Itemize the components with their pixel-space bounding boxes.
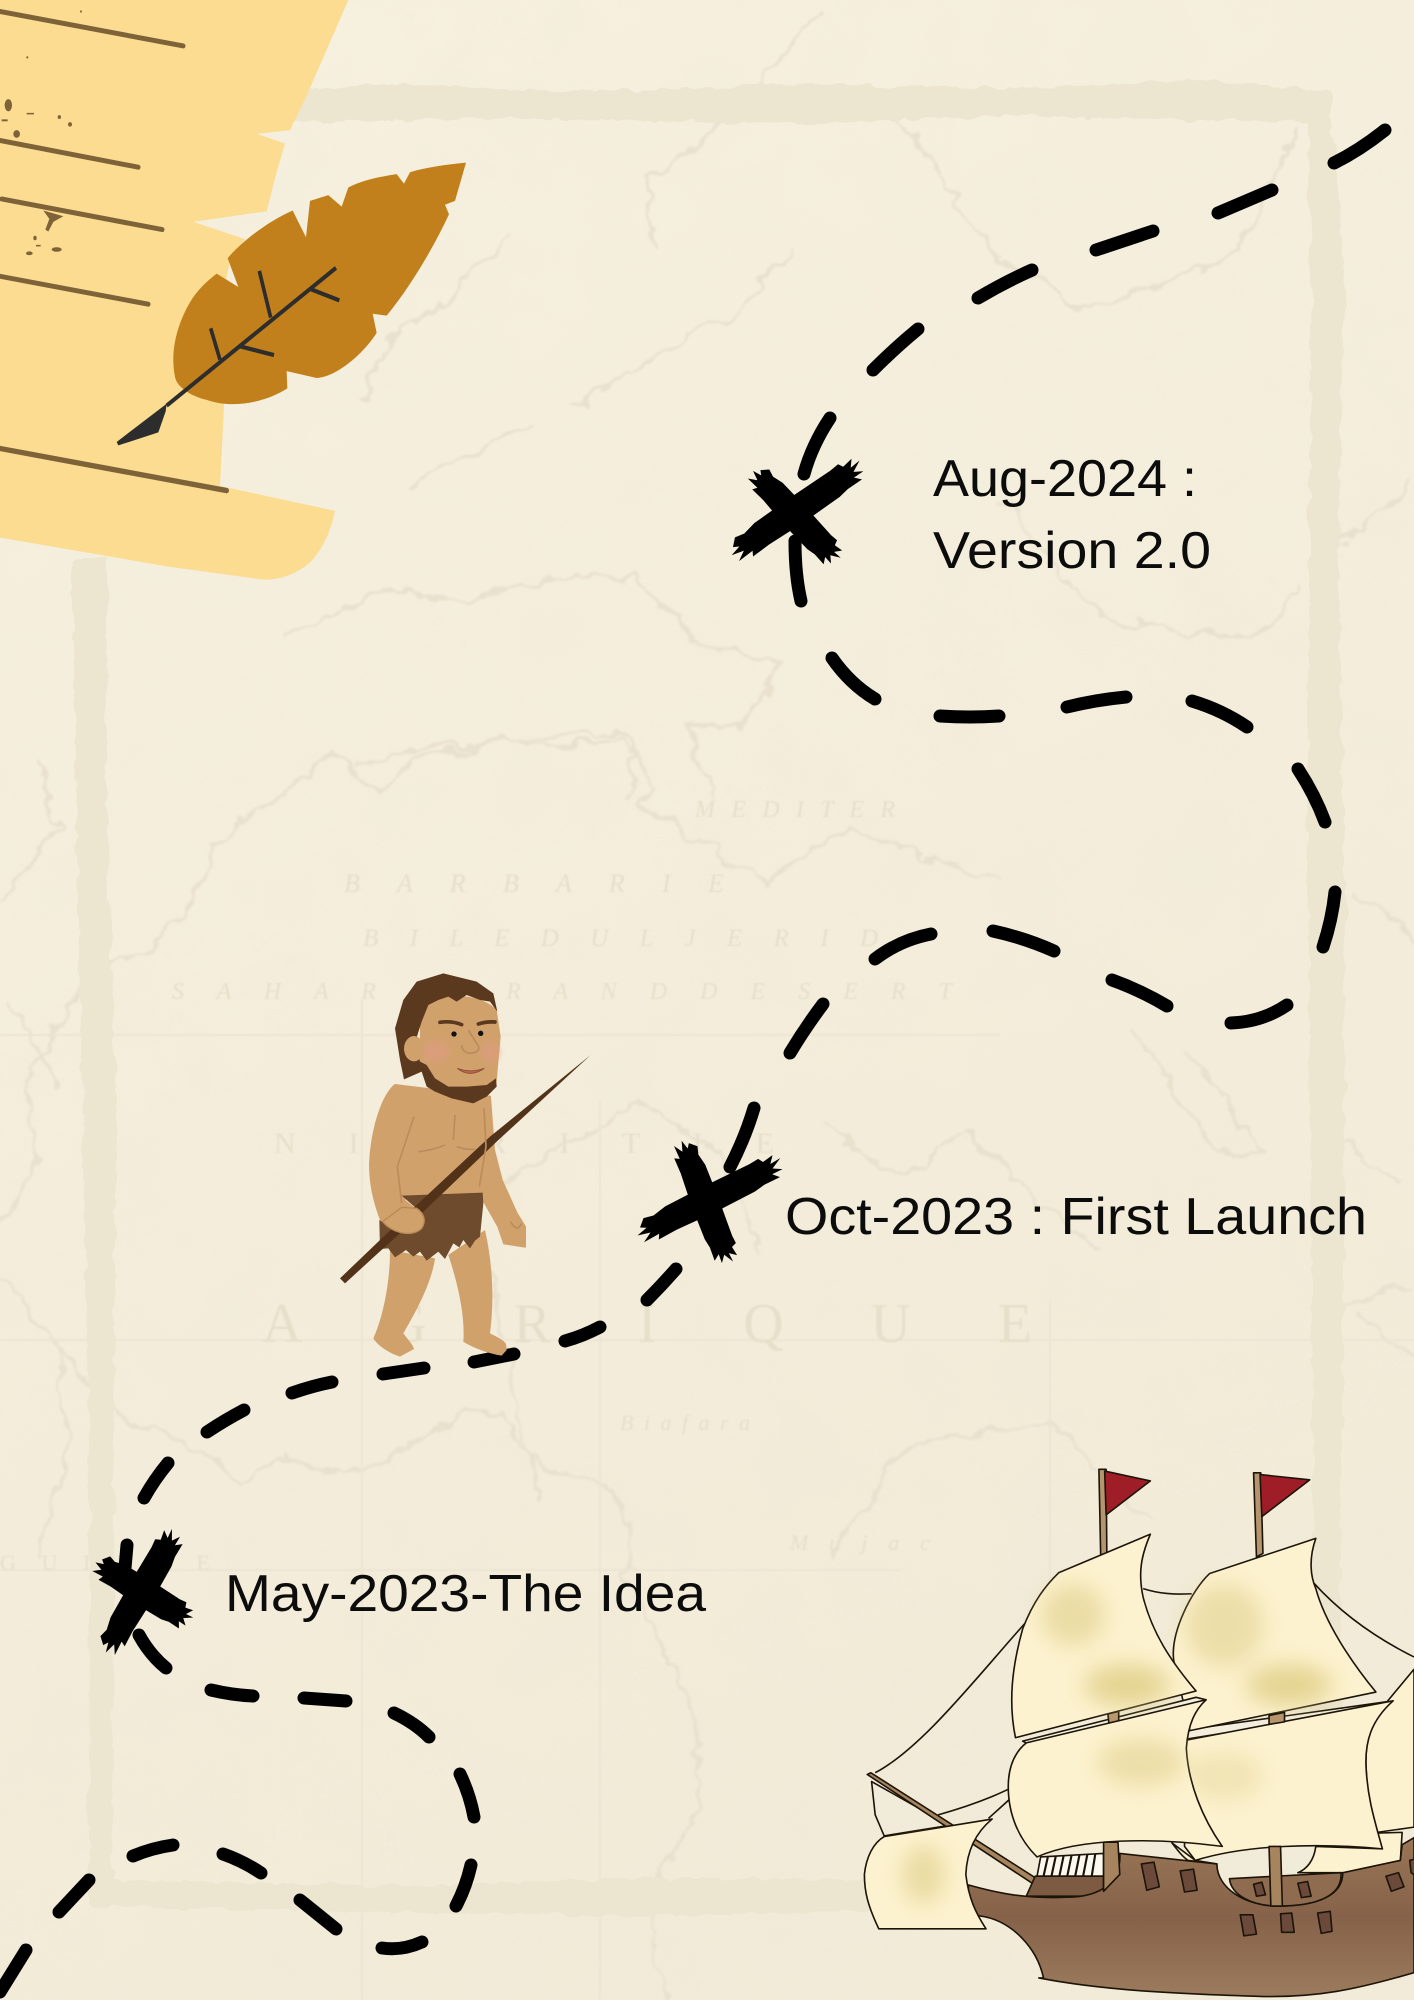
icon: sailing ship [864, 1469, 1414, 1997]
torso and arm [370, 1085, 525, 1247]
icon: caveman with spear [340, 973, 591, 1357]
fur skirt [379, 1193, 483, 1261]
X mark: Aug-2024 [723, 453, 871, 571]
hand [383, 1207, 424, 1233]
icon: parchment scroll with writing [0, 0, 348, 580]
front leg [448, 1230, 507, 1356]
inner deck [1229, 1873, 1341, 1906]
masts on deck [1104, 1842, 1282, 1906]
background antique map: B A R B A R I E [344, 869, 724, 898]
X mark: May-2023 [88, 1524, 198, 1659]
bow sail [864, 1819, 992, 1929]
body lines [397, 1108, 522, 1228]
background antique map: Mujac [789, 1530, 930, 1555]
deck railing [1026, 1853, 1104, 1896]
background antique map: Biafara [620, 1410, 750, 1435]
background antique map: G U I N E E [0, 1550, 210, 1575]
label: Aug-2024 Version 2.0 [933, 450, 1211, 580]
background antique map: N I G R I T I E [274, 1127, 774, 1160]
bowsprit [867, 1773, 1066, 1898]
background antique map: S A H A R A G R A N D D E S E R T [172, 979, 954, 1005]
background antique map: M E D I T E R [694, 797, 895, 823]
background antique map: B I L E D U L J E R I D [363, 925, 878, 952]
hull [968, 1838, 1414, 1997]
X mark: Oct-2023 [630, 1135, 789, 1268]
label: May-2023 The Idea: May-2023-The Idea [225, 1565, 706, 1623]
icon: feather quill [117, 163, 466, 445]
back leg [373, 1250, 435, 1357]
head and face [395, 973, 501, 1103]
label: Aug-2024 Version 2.0: Version 2.0 [933, 522, 1211, 580]
spear [340, 1055, 591, 1283]
label: Aug-2024 Version 2.0: Aug-2024 : [933, 450, 1197, 508]
background antique map: A G R I Q U E [262, 1293, 1032, 1355]
hull gun ports [1141, 1859, 1414, 1936]
label: Oct-2023 First Launch: Oct-2023 : First Launch [785, 1188, 1367, 1246]
main sails [1008, 1534, 1414, 1860]
rigging and light sails behind [872, 1583, 1414, 1878]
masts and flags [1099, 1469, 1310, 1557]
